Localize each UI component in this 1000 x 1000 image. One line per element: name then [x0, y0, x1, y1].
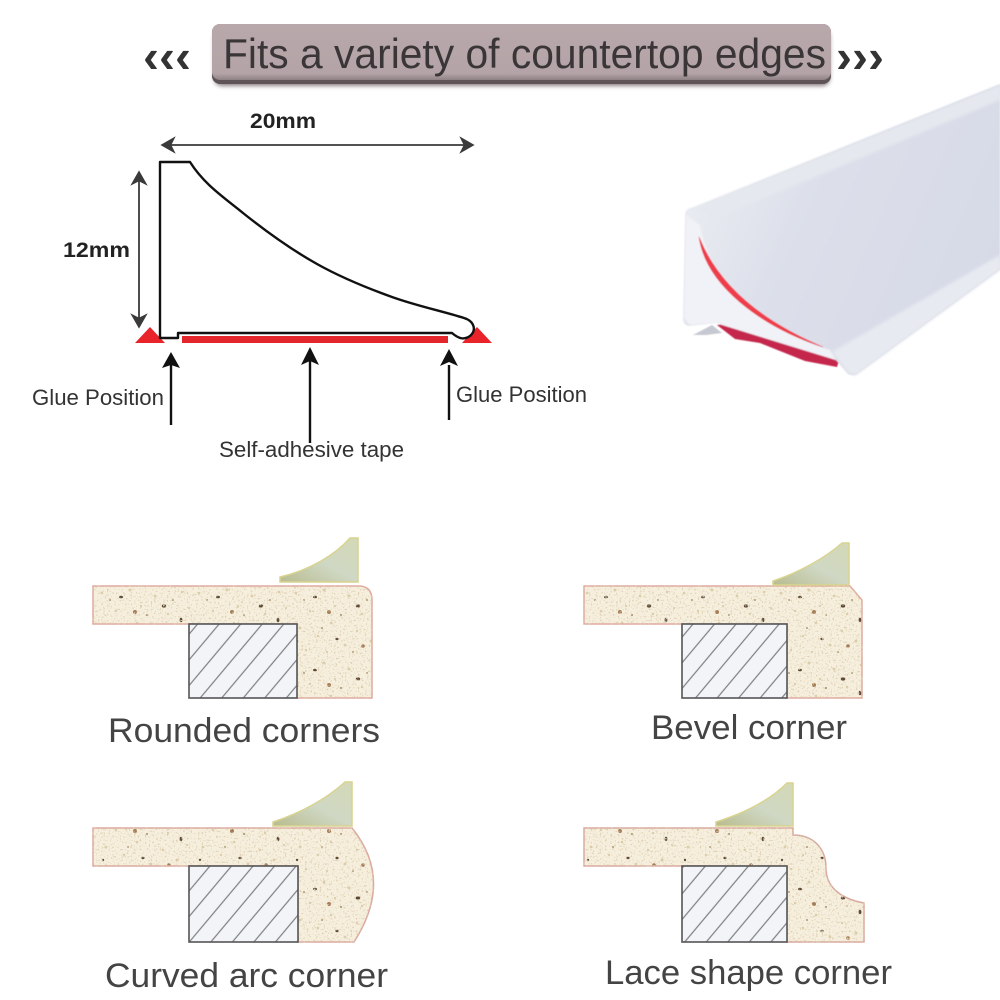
label: right glue position: Glue Position [456, 382, 587, 407]
width label: 20mm [250, 110, 316, 133]
countertop [584, 828, 864, 942]
strip [273, 782, 352, 826]
grey backing sliver [693, 325, 722, 335]
panel: lace shape corner [584, 783, 892, 992]
arrow: self-adhesive tape [301, 347, 319, 443]
title banner [212, 24, 831, 86]
strip profile outline [160, 162, 474, 338]
cabinet hatch [682, 624, 787, 698]
countertop [93, 828, 374, 942]
cabinet hatch [682, 866, 787, 942]
red profile curve [699, 237, 823, 347]
top ridge highlight [694, 85, 1000, 218]
product photo: white strip [683, 84, 1000, 375]
strip silhouette [683, 84, 1000, 375]
left chevrons: ‹‹‹ [143, 30, 191, 82]
arrow: right glue position [440, 349, 458, 420]
glue triangle left [135, 327, 165, 343]
width arrow [161, 137, 474, 153]
caption: Bevel corner [651, 709, 847, 747]
strip [716, 783, 793, 826]
arrow: left glue position [162, 352, 180, 425]
height label: 12mm [63, 239, 130, 262]
end cap glow [684, 215, 836, 360]
title text: Fits a variety of countertop edges [223, 30, 826, 77]
countertop [584, 586, 862, 698]
strip [773, 543, 849, 585]
panel: curved arc corner [93, 782, 388, 995]
label: left glue position: Glue Position [32, 385, 164, 410]
caption: Lace shape corner [605, 954, 892, 992]
adhesive tape bar [182, 336, 448, 343]
red tape underneath [717, 323, 840, 367]
bottom lip [832, 255, 1000, 375]
cabinet hatch [189, 866, 298, 942]
panel: rounded corners [93, 538, 380, 750]
caption: Rounded corners [108, 712, 380, 750]
panel: bevel corner [584, 543, 862, 747]
label: tape: Self-adhesive tape [219, 437, 404, 462]
strip [280, 538, 358, 582]
right chevrons: ››› [836, 30, 884, 82]
glue triangle right [462, 327, 492, 343]
cabinet hatch [189, 624, 297, 698]
caption: Curved arc corner [105, 957, 388, 995]
countertop [93, 586, 372, 698]
height arrow [131, 171, 147, 328]
profile dimension diagram [32, 110, 587, 462]
